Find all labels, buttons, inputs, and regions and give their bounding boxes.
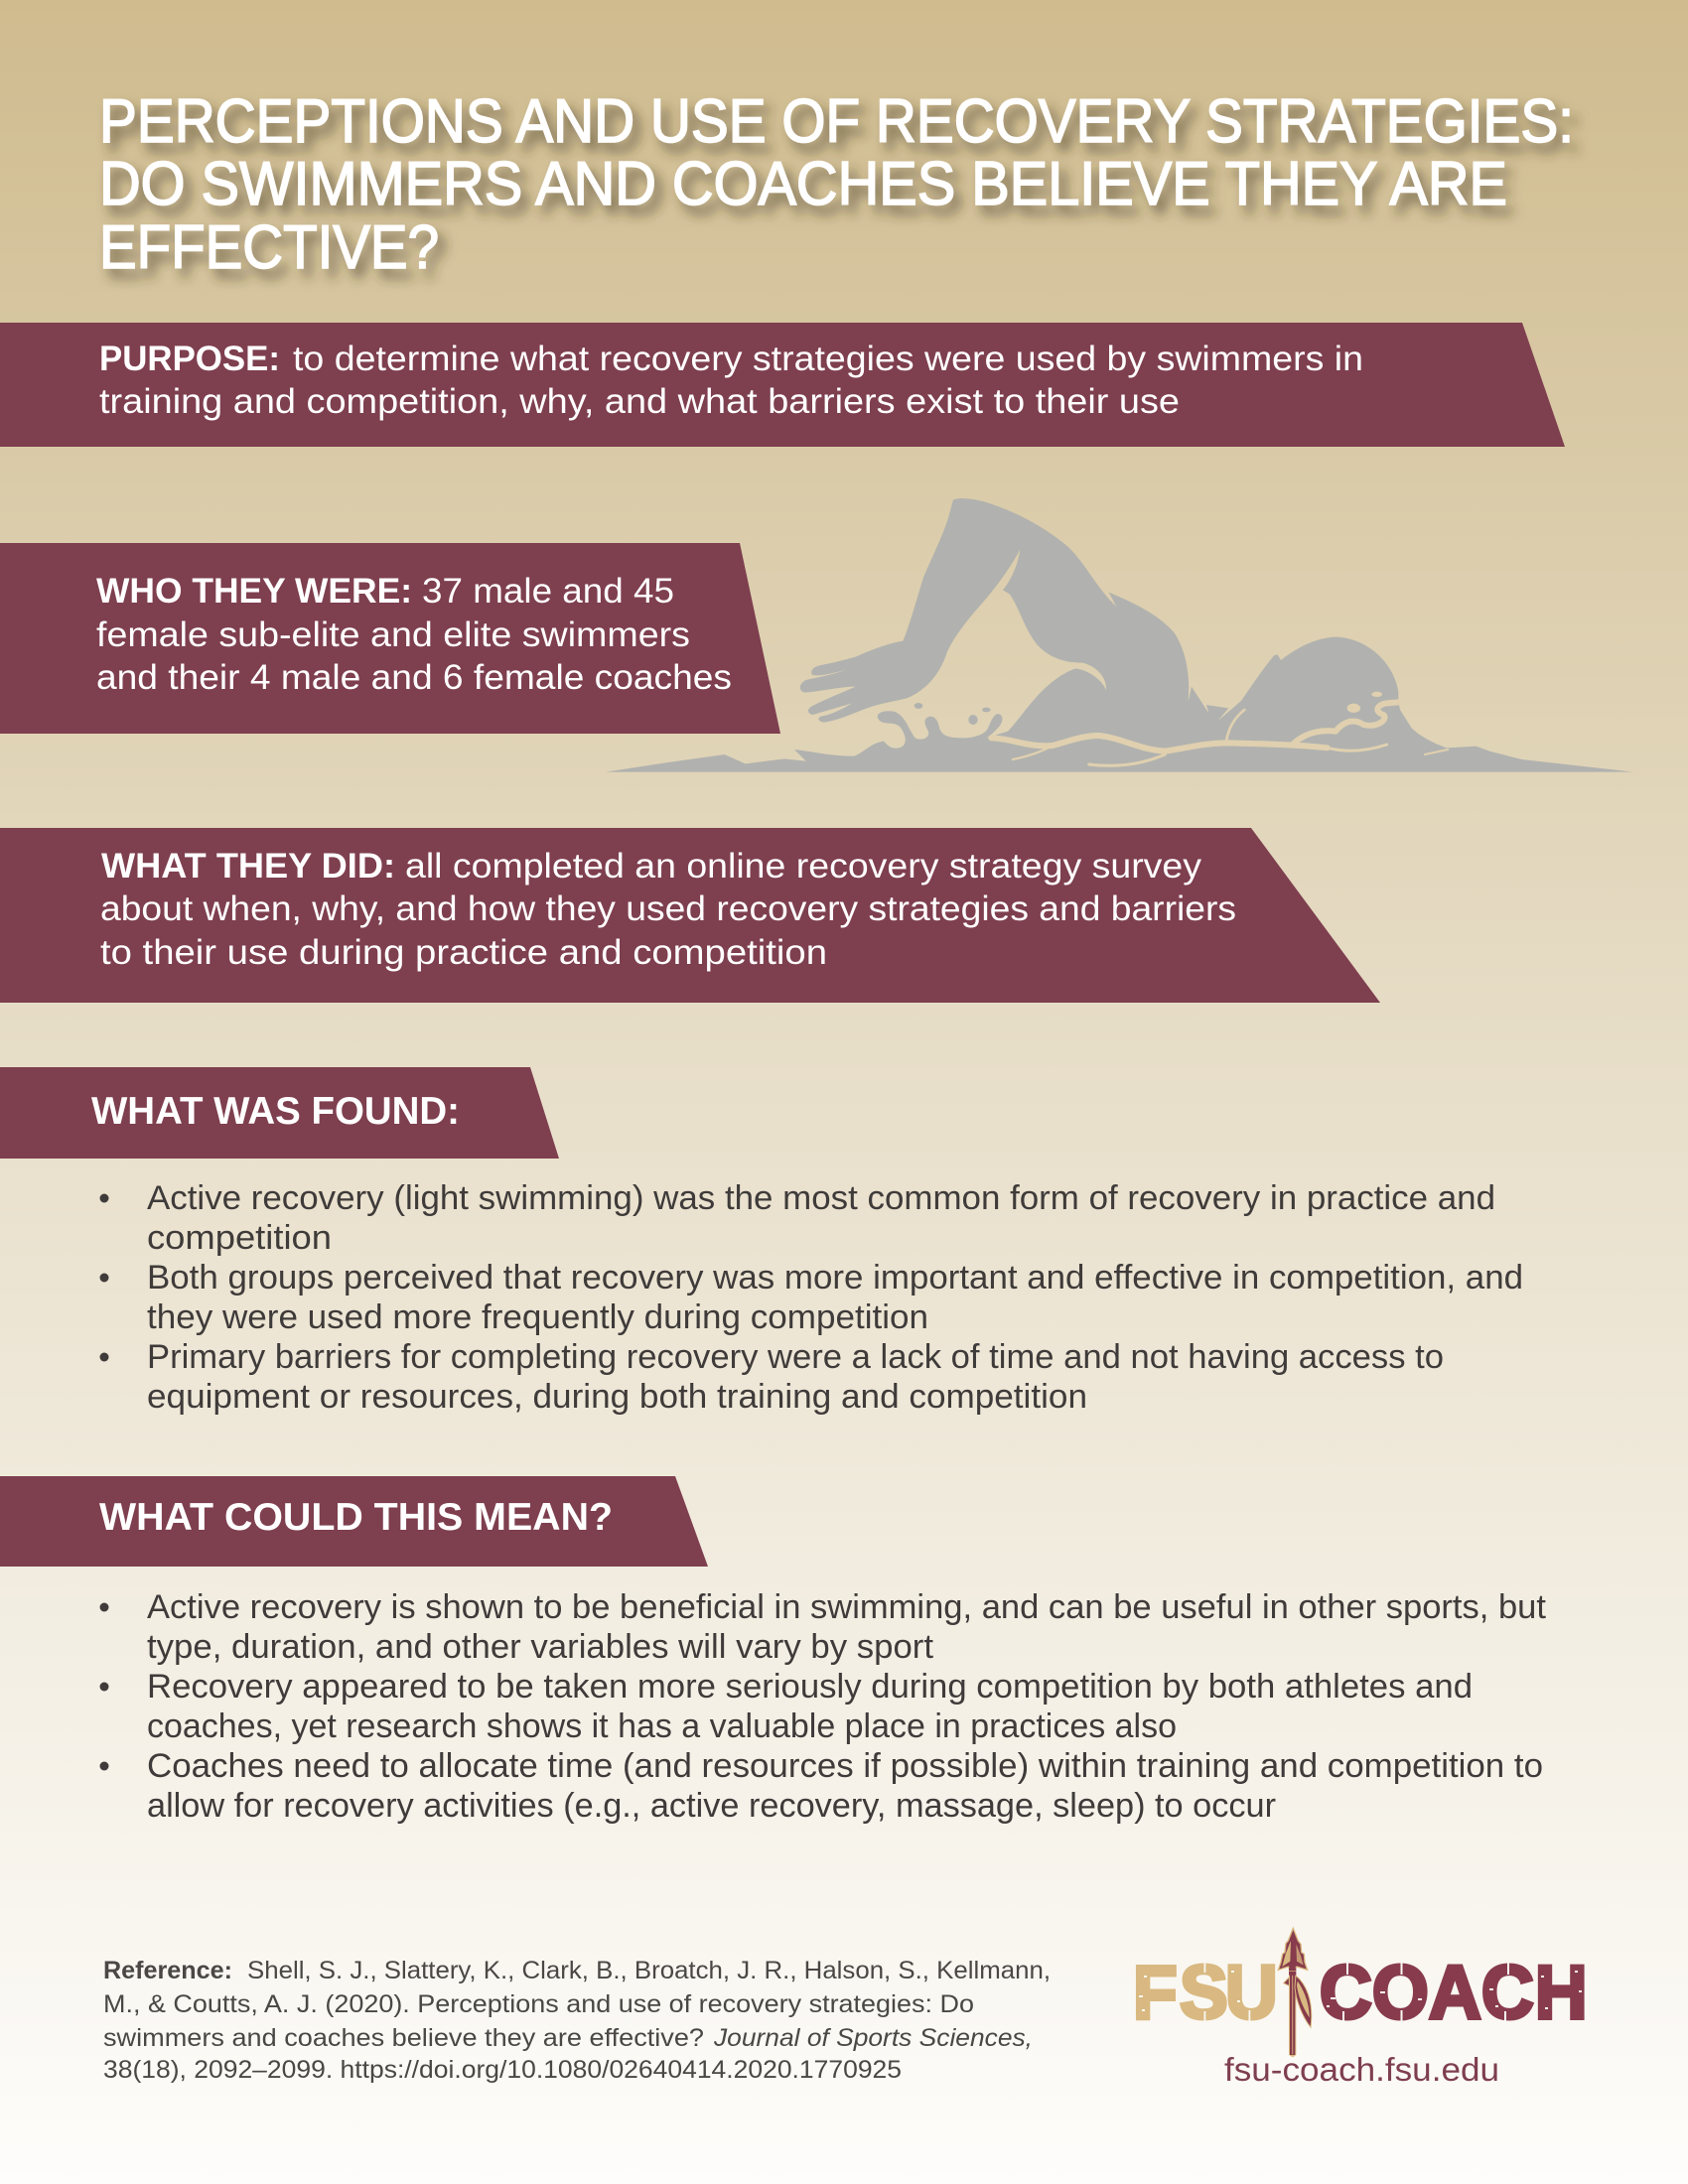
reference citation: M., & Coutts, A. J. (2020). Perceptions and use of recovery strategies: Do	[103, 1990, 974, 2018]
findings list: Active recovery (light swimming) was the most common form of recovery in practice and	[147, 1179, 1495, 1217]
heading: what was found: WHAT WAS FOUND:	[91, 1090, 460, 1133]
logo: FSU Coach	[1133, 1928, 1588, 2088]
findings list: they were used more frequently during competition	[147, 1298, 928, 1336]
panel: who they were: WHO THEY WERE:	[96, 572, 412, 611]
heading: what could this mean: WHAT COULD THIS MEAN?	[99, 1496, 613, 1539]
title: EFFECTIVE?	[99, 213, 439, 282]
panel: who they were: and their 4 male and 6 female coaches	[96, 658, 732, 697]
panel: what they did: to their use during practice and competition	[100, 933, 827, 972]
panel: what they did: all completed an online recovery strategy survey	[405, 847, 1202, 886]
reference citation: Journal of Sports Sciences,	[713, 2024, 1033, 2052]
panel: purpose: training and competition, why, and what barriers exist to their use	[99, 382, 1180, 421]
panel: who they were: female sub-elite and elite swimmers	[96, 615, 690, 654]
implications list: coaches, yet research shows it has a valuable place in practices also	[147, 1707, 1177, 1745]
implications list: allow for recovery activities (e.g., active recovery, massage, sleep) to occur	[147, 1787, 1276, 1825]
logo url: fsu-coach.fsu.edu	[1224, 2051, 1499, 2088]
panel: purpose: to determine what recovery strategies were used by swimmers in	[293, 340, 1363, 378]
logo wordmark: COACH: COACH	[1320, 1951, 1588, 2034]
heading: what could this mean	[0, 1476, 708, 1567]
implications list: Recovery appeared to be taken more seriously during competition by both athletes and	[147, 1668, 1473, 1706]
panel: purpose: PURPOSE:	[99, 340, 280, 378]
implications list	[99, 1588, 1547, 1825]
panel: what they did: about when, why, and how they used recovery strategies and barriers	[100, 889, 1236, 928]
reference citation: Reference:	[103, 1957, 232, 1984]
reference citation	[103, 1957, 1051, 2084]
findings list: Both groups perceived that recovery was more important and effective in competition, and	[147, 1259, 1523, 1297]
implications list: Active recovery is shown to be beneficial in swimming, and can be useful in other sports, but	[147, 1588, 1547, 1626]
icon: swimmer silhouette	[606, 498, 1633, 772]
icon: spear with feather	[1278, 1928, 1312, 2057]
panel: purpose	[0, 323, 1565, 447]
implications list: type, duration, and other variables will vary by sport	[147, 1628, 934, 1666]
logo wordmark: FSU: FSU	[1133, 1951, 1278, 2034]
reference citation: swimmers and coaches believe they are effective?	[103, 2024, 704, 2052]
panel: who they were	[0, 543, 780, 734]
panel: who they were: 37 male and 45	[422, 572, 674, 611]
panel: what they did: WHAT THEY DID:	[101, 847, 395, 886]
panel: what they did	[0, 828, 1380, 1003]
findings list	[99, 1179, 1523, 1416]
title: PERCEPTIONS AND USE OF RECOVERY STRATEGIES:	[99, 87, 1574, 156]
implications list: Coaches need to allocate time (and resources if possible) within training and competition to	[147, 1747, 1543, 1785]
title	[99, 87, 1574, 282]
reference citation: Shell, S. J., Slattery, K., Clark, B., Broatch, J. R., Halson, S., Kellmann,	[247, 1957, 1051, 1984]
reference citation: 38(18), 2092–2099. https://doi.org/10.1080/02640414.2020.1770925	[103, 2056, 902, 2084]
findings list: competition	[147, 1219, 332, 1257]
findings list: equipment or resources, during both training and competition	[147, 1378, 1087, 1416]
heading: what was found	[0, 1067, 559, 1159]
findings list: Primary barriers for completing recovery were a lack of time and not having access to	[147, 1338, 1444, 1376]
title: DO SWIMMERS AND COACHES BELIEVE THEY ARE	[99, 150, 1507, 218]
